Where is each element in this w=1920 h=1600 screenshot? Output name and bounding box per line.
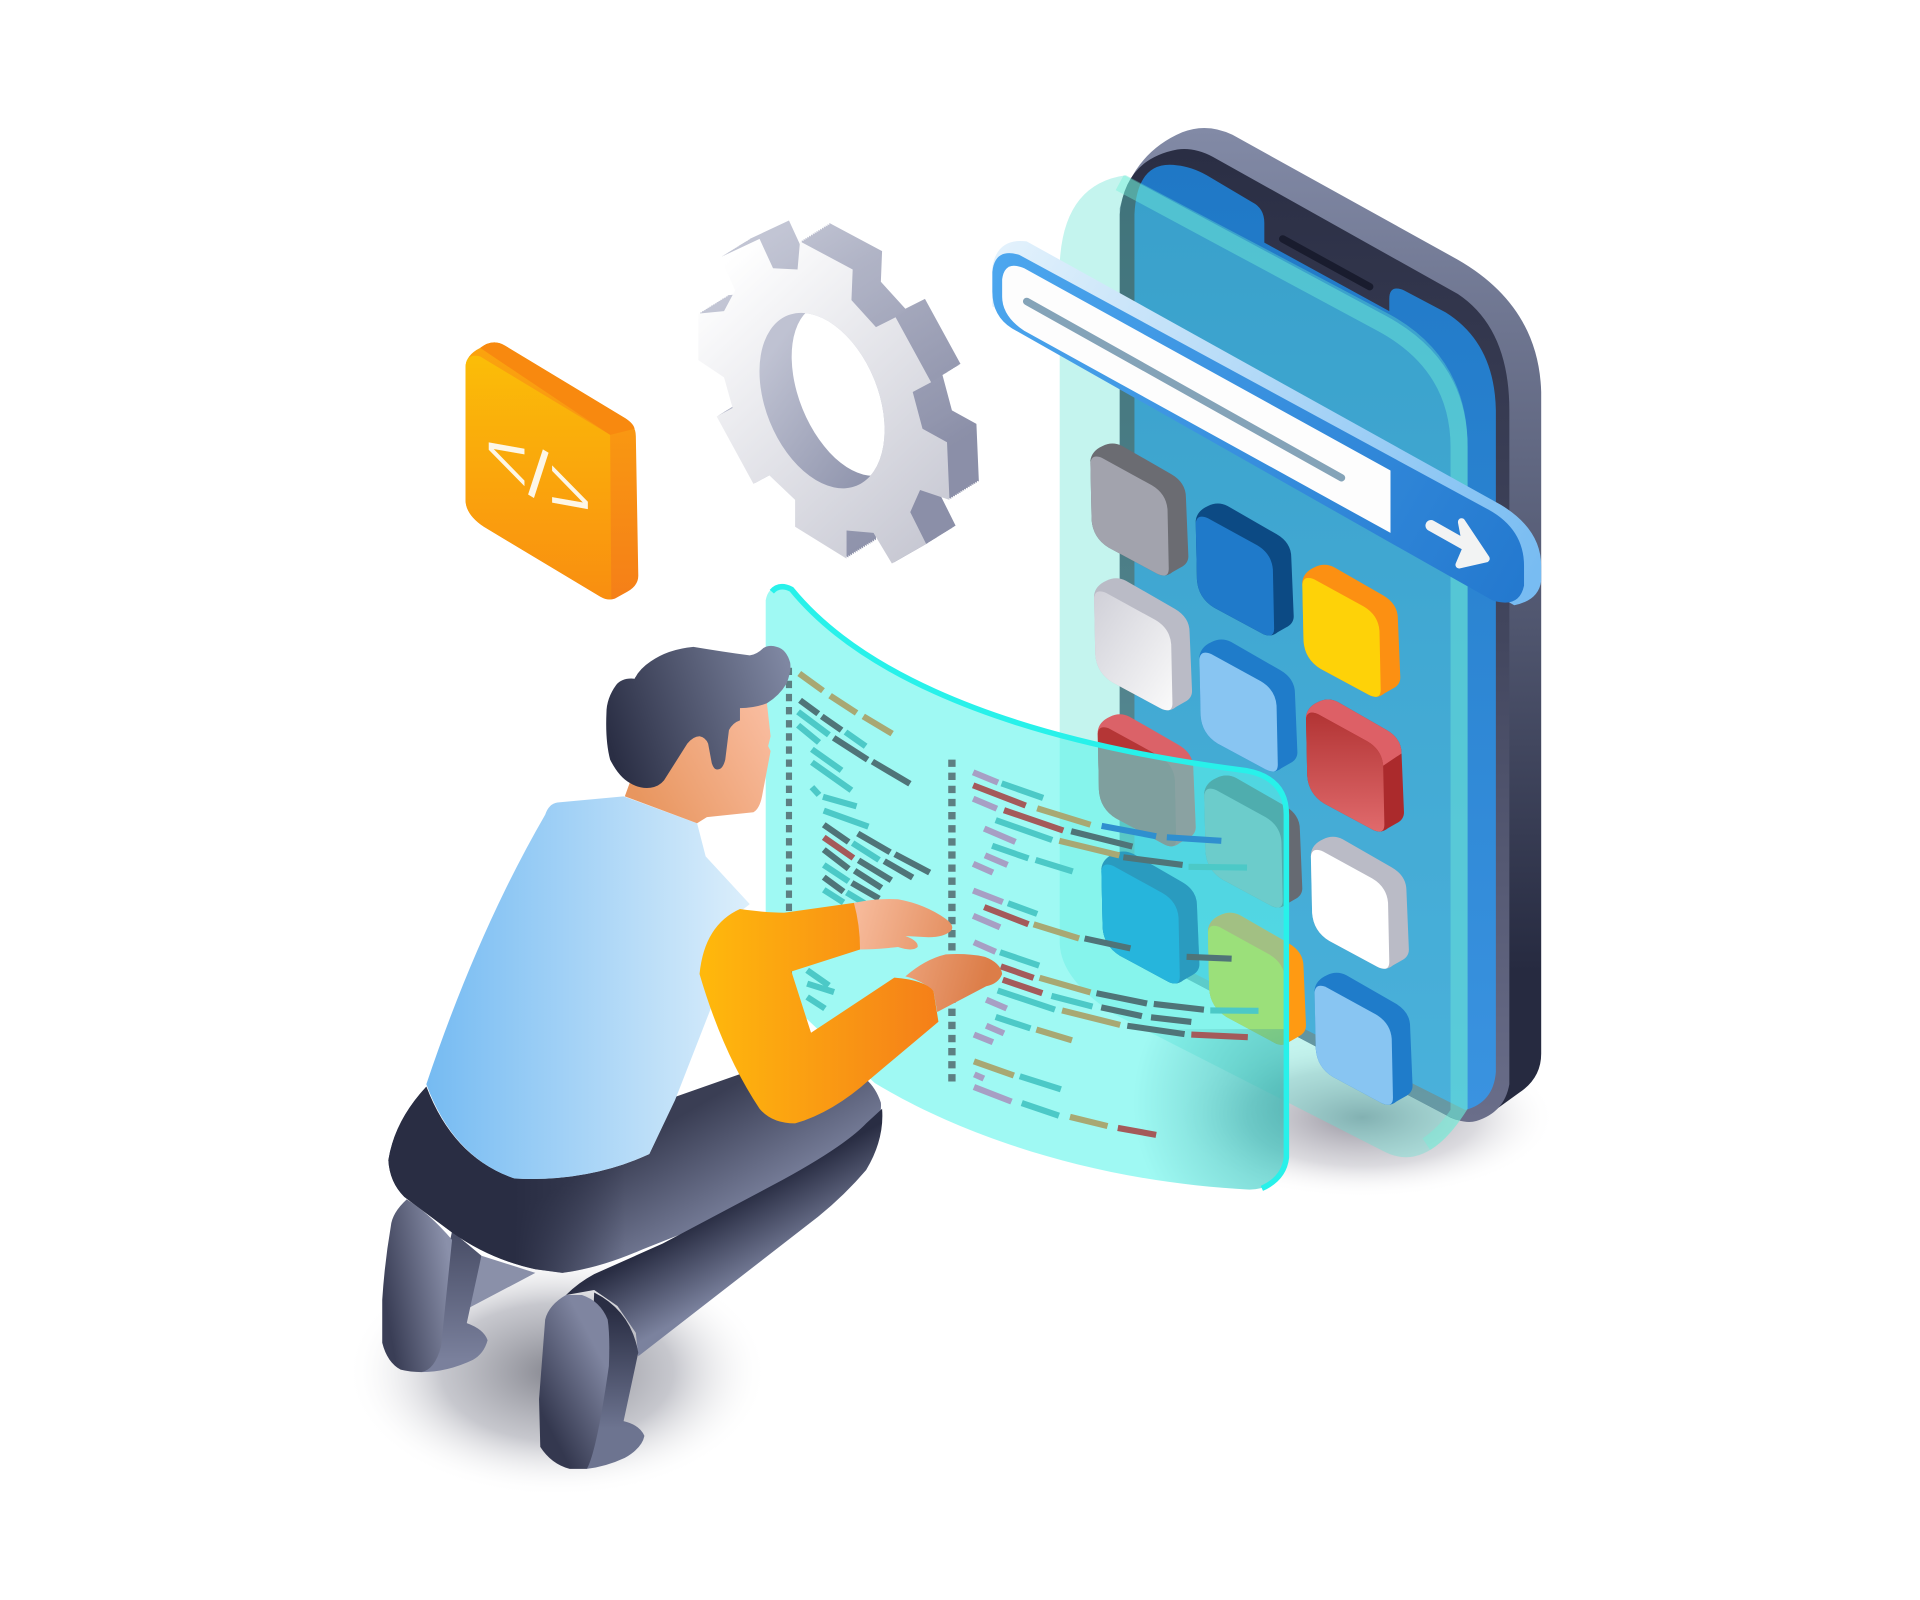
apps seen through glass	[1098, 750, 1284, 1190]
holographic code panel	[766, 587, 1306, 1201]
hair	[606, 646, 790, 788]
code gutter right	[949, 760, 955, 1084]
search text line	[1027, 301, 1342, 478]
icon: dark blue app	[1196, 504, 1294, 636]
icon: white app	[1311, 837, 1409, 969]
gear front face	[698, 239, 949, 564]
phone bezel	[1120, 149, 1509, 1122]
code lines	[798, 674, 1259, 1135]
front knee	[539, 1295, 609, 1469]
icon: gray app	[1090, 443, 1188, 576]
purple code lines	[973, 772, 1015, 1102]
icon: red app right	[1306, 700, 1404, 832]
hip shadow	[388, 1087, 676, 1273]
person crouching	[382, 646, 1002, 1469]
icon: blue app through glass	[1101, 851, 1199, 984]
hips and upper thigh	[388, 1073, 881, 1273]
smartphone	[1120, 128, 1541, 1122]
icon: light blue app	[1199, 640, 1297, 772]
pane rim	[1120, 183, 1459, 1145]
tile face	[466, 356, 611, 599]
right hand	[905, 954, 1002, 1012]
maroon code lines	[824, 785, 1248, 1135]
search bar pale edge	[992, 241, 1541, 605]
icon: red app through glass	[1098, 750, 1196, 846]
front thigh	[566, 1109, 882, 1356]
search bar	[992, 241, 1541, 605]
pane body	[1060, 175, 1468, 1157]
icon: yellow app	[1302, 565, 1400, 697]
glass rim	[772, 587, 1286, 1188]
back leg calf	[468, 1256, 535, 1308]
search bar body	[992, 253, 1524, 603]
khaki code lines	[799, 674, 1120, 1126]
icon: search arrow	[1431, 522, 1486, 565]
front foot	[587, 1292, 644, 1469]
app icons grid	[1090, 443, 1413, 1105]
phone outer shell	[1120, 128, 1541, 1121]
earpiece speaker	[1283, 239, 1370, 287]
blue code lines	[1102, 826, 1221, 841]
back foot	[421, 1231, 488, 1372]
icon: gray app through glass	[1204, 776, 1284, 908]
dark code lines	[800, 700, 1232, 1034]
gear extrusion	[700, 221, 979, 562]
illustration: developer coding a mobile app	[382, 128, 1542, 1476]
back knee	[382, 1199, 452, 1372]
tile side	[466, 342, 638, 599]
gear hole	[760, 312, 884, 488]
icon: red app left	[1098, 714, 1196, 846]
code gutter left	[786, 668, 791, 1011]
shirt torso	[426, 796, 750, 1179]
neck and face	[625, 703, 771, 823]
floor shadow under phone	[1169, 1036, 1556, 1198]
phone screen	[1134, 165, 1496, 1110]
icon: silver app	[1094, 578, 1192, 710]
gear icon	[698, 221, 979, 564]
code symbol: </>	[485, 402, 591, 547]
orange sleeves	[700, 903, 938, 1123]
search input field	[1002, 266, 1391, 533]
tile top edge	[480, 342, 635, 435]
floor shadow under person	[347, 1247, 768, 1497]
icon: orange app	[1208, 913, 1306, 1045]
icon: green app through glass	[1208, 912, 1284, 1045]
icon: dark gray app	[1204, 775, 1302, 908]
left hand	[854, 899, 952, 949]
icon: blue app under glass	[1101, 851, 1199, 984]
glass corner shade	[1155, 1029, 1284, 1190]
icon: light blue app bottom	[1315, 973, 1413, 1105]
code tag tile	[466, 342, 638, 599]
glass body	[766, 587, 1289, 1190]
translucent pane in front of phone	[1060, 175, 1468, 1157]
teal code lines	[798, 712, 1259, 1116]
